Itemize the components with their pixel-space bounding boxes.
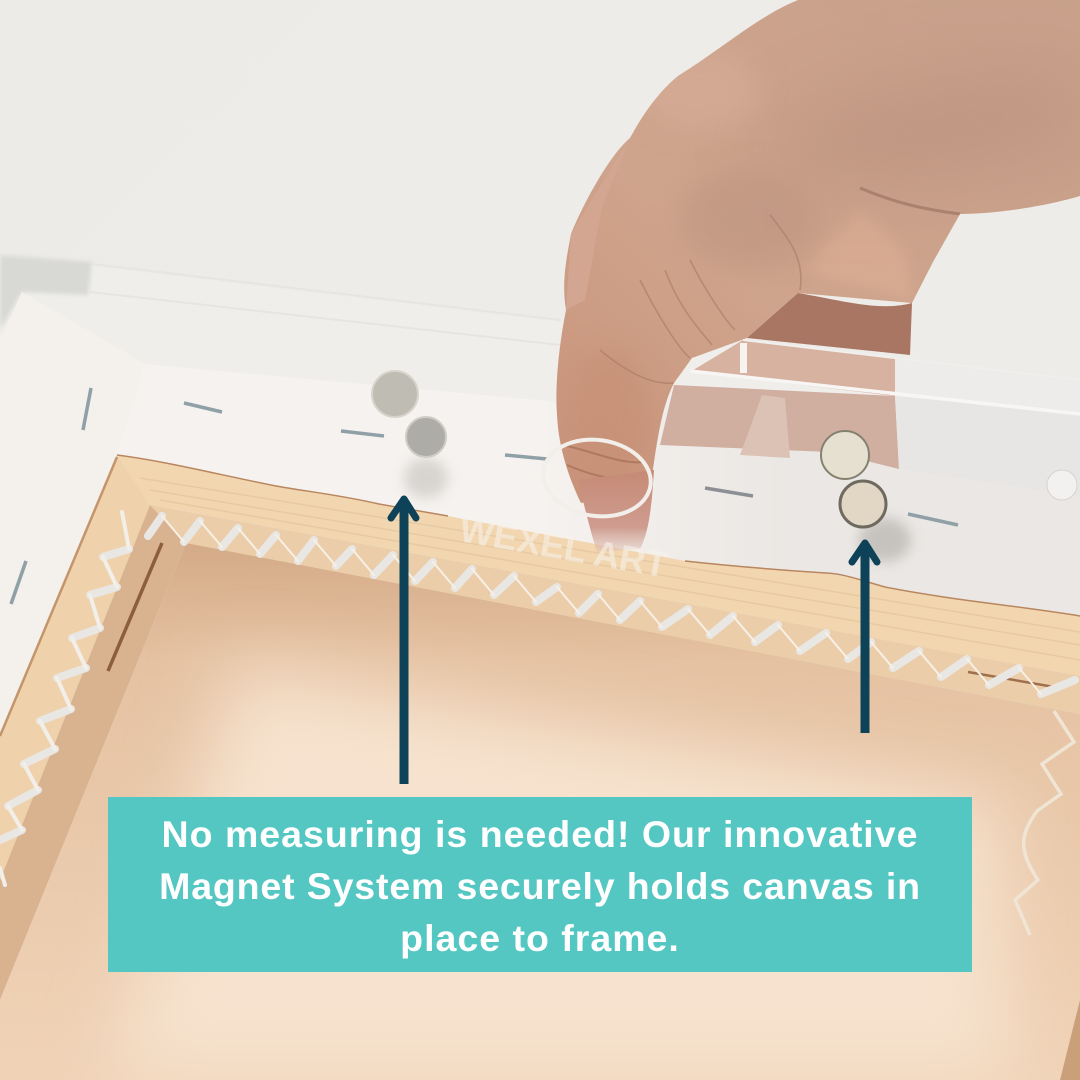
shadowed palm behind acrylic [747,293,912,355]
fingertip below ring [578,470,654,552]
acrylic spiral spring [0,512,1075,885]
callout: magnet system description [108,797,972,972]
arrow: right magnet [852,543,877,733]
acrylic frame top edge [0,255,1080,640]
faint logo on acrylic: WEXEL ART [457,509,671,585]
callout: magnet system description: No measuring is needed! Our innovative [162,813,918,855]
back of canvas [0,543,1080,1080]
stretcher slot [108,543,162,671]
right thin spring [1015,711,1074,935]
acrylic pin under fingertip [538,433,656,523]
white canvas fold strip with staples [11,364,1080,616]
magnets [372,371,1077,527]
callout: magnet system description: place to frame. [400,917,680,959]
arrow: left magnet [391,499,416,784]
acrylic bar over fingers [660,340,1080,496]
callout: magnet system description: Magnet System securely holds canvas in [159,865,921,907]
hand [556,0,1080,503]
wooden stretcher frame [0,455,1080,1000]
left white canvas flap [0,292,145,736]
